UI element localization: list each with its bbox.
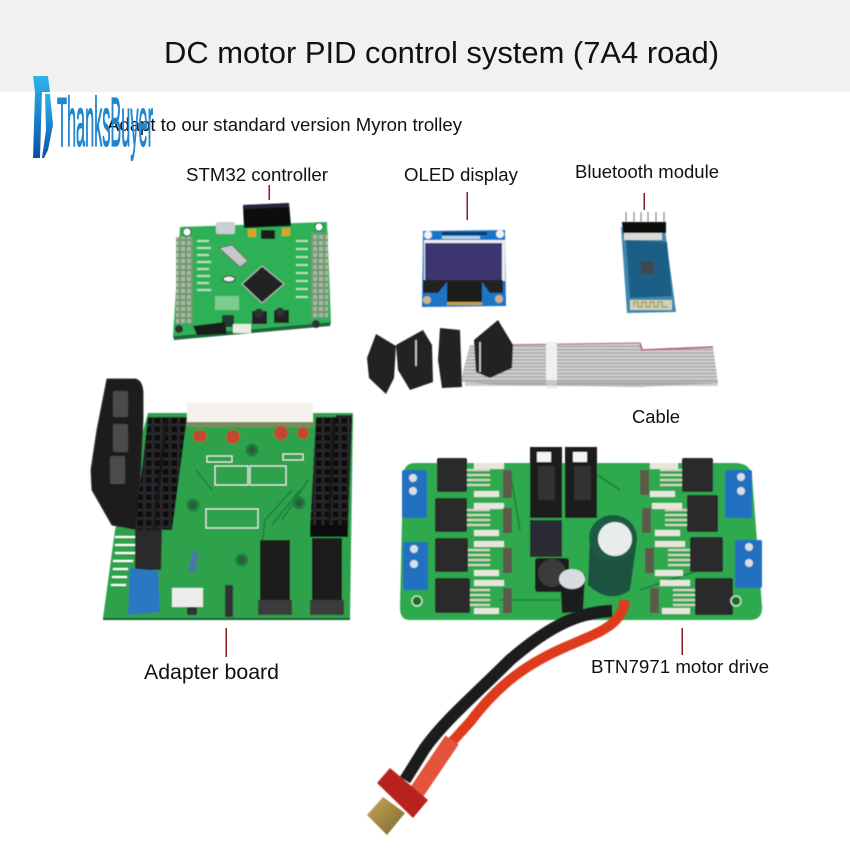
subtitle: Adapt to our standard version Myron trolley: [107, 115, 462, 135]
logo: ThanksBuyer: [33, 76, 153, 161]
header band: [0, 0, 850, 92]
label: BTN7971 motor drive: BTN7971 motor drive: [591, 657, 769, 677]
large capacitor: [588, 515, 637, 596]
black wire: [405, 611, 612, 780]
label: Adapter board: Adapter board: [144, 660, 279, 684]
cable connectors: [367, 320, 513, 394]
power wires and T-plug: [367, 600, 625, 835]
red wire: [450, 600, 625, 744]
label: OLED display: [404, 165, 518, 220]
PS2 socket: [91, 379, 143, 530]
title: DC motor PID control system (7A4 road): [164, 35, 719, 70]
blue terminals: [402, 470, 762, 590]
resistors: [503, 470, 659, 613]
gold prongs: [367, 797, 405, 835]
white connectors: [187, 403, 313, 427]
MOSFET pads: [474, 463, 690, 614]
blue terminal: [128, 568, 160, 615]
driver IC: [530, 520, 562, 557]
connector body: [377, 768, 428, 818]
text: ThanksBuyer: [57, 83, 153, 161]
BTN7971 motor drive board: [400, 447, 762, 620]
MOSFETs: [435, 458, 733, 615]
Bluetooth module: [621, 212, 676, 313]
ribbon cable: [367, 320, 718, 394]
label: Bluetooth module: Bluetooth module: [575, 162, 719, 182]
OLED display module: [422, 230, 506, 307]
label: STM32 controller: STM32 controller: [186, 165, 328, 185]
label: Cable: Cable: [632, 407, 680, 427]
MOSFET legs: [467, 470, 695, 605]
small capacitor: [559, 569, 585, 613]
label: OLED display: OLED display: [404, 165, 518, 185]
red heat-shrink sleeve: [414, 740, 452, 796]
adapter board: [91, 379, 353, 620]
IDC sockets: [530, 447, 597, 518]
inductor: [535, 558, 569, 592]
label: Adapter board: [144, 628, 279, 684]
black headers: [135, 415, 352, 570]
STM32 controller board: [173, 203, 331, 340]
